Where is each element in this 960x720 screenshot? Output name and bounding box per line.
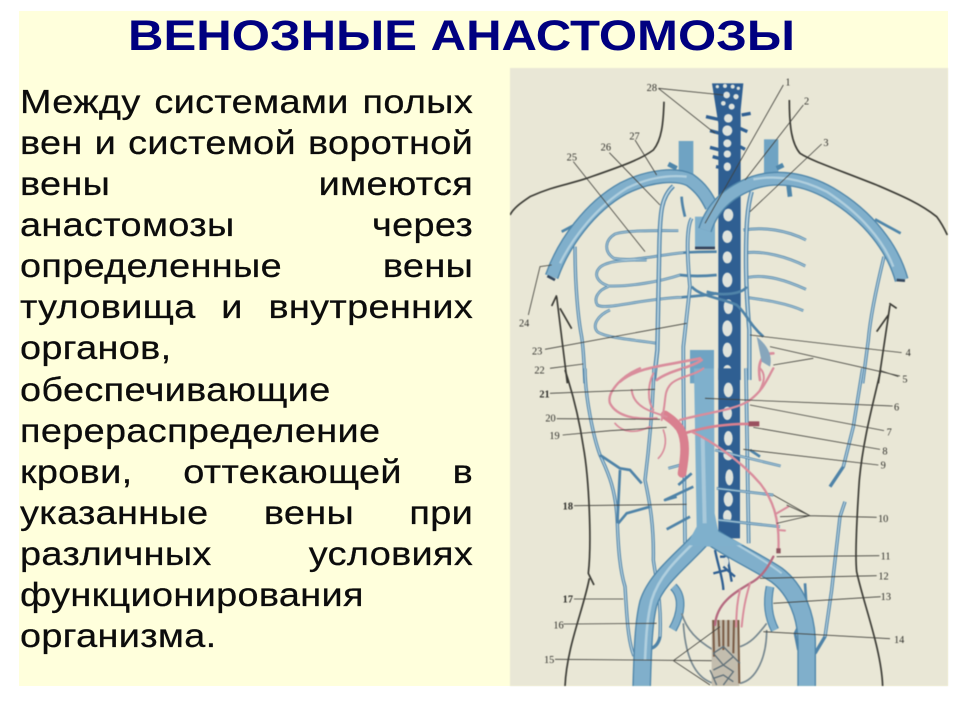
text block: description: определенные вены [20, 248, 473, 285]
text block: description: организма. [20, 618, 217, 655]
azygos and hemiazygos veins [654, 186, 763, 380]
portal vein system in pink [609, 368, 788, 627]
numbers: lower labels [539, 374, 908, 666]
numbers: upper labels: 4 [906, 348, 911, 359]
text block: description: вены имеются [20, 166, 473, 203]
body outline: shoulders and flanks [510, 100, 947, 383]
numbers: lower labels: 12 [878, 571, 889, 582]
text block: description: Между системами полых [20, 84, 473, 121]
lumbar and ascending veins [665, 368, 781, 543]
numbers: upper labels: 23 [532, 346, 542, 357]
pelvic venous loops [682, 613, 767, 683]
numbers: lower labels: 21 [539, 389, 550, 400]
numbers: upper labels: 25 [567, 153, 577, 164]
numbers: lower labels: 18 [563, 501, 573, 512]
numbers: lower labels: 20 [545, 414, 556, 425]
vertebral plexus lower [713, 368, 740, 590]
body outline: waist and hips [565, 370, 883, 687]
rectum with venous plexus [710, 620, 740, 687]
title: ВЕНОЗНЫЕ АНАСТОМОЗЫ [128, 12, 795, 60]
numbers: lower labels: 16 [553, 621, 564, 632]
vertebral venous plexus [706, 83, 751, 380]
leader lines [528, 85, 902, 376]
text block: description: перераспределение [20, 413, 380, 450]
numbers: upper labels: 26 [601, 143, 611, 154]
numbers: upper labels: 1 [785, 77, 791, 88]
numbers: lower labels: 15 [544, 655, 554, 666]
brachiocephalic and jugular veins [547, 139, 905, 281]
numbers: lower labels: 8 [882, 446, 888, 457]
numbers: upper labels: 24 [519, 319, 529, 330]
numbers: upper labels: 2 [804, 96, 809, 107]
text block: description [20, 84, 473, 655]
text block: description: указанные вены при [20, 495, 473, 532]
text block: description: функционирования [20, 577, 364, 614]
numbers: lower labels: 19 [549, 431, 560, 442]
numbers: lower labels: 14 [894, 635, 904, 646]
ribs: intercostal veins [595, 229, 806, 343]
text block: description: туловища и внутренних [20, 289, 473, 326]
numbers: upper labels: 3 [823, 138, 829, 149]
text block: description: вен и системой воротной [20, 125, 473, 162]
numbers: lower labels: 5 [902, 374, 908, 385]
leader lines [550, 371, 898, 685]
text block: description: анастомозы через [20, 207, 473, 244]
numbers: lower labels: 7 [887, 427, 892, 438]
superficial side veins [585, 368, 863, 656]
inferior vena cava top and pink veins [620, 337, 773, 383]
numbers: lower labels: 9 [881, 460, 886, 471]
numbers: lower labels: 10 [878, 514, 888, 525]
anatomical diagram of venous anastomoses [510, 68, 948, 686]
text block: description: обеспечивающие [20, 372, 331, 409]
inferior vena cava and iliac veins [642, 368, 807, 687]
upper torso [510, 77, 947, 383]
numbers: upper labels: 28 [647, 83, 657, 94]
text block: description: органов, [20, 330, 171, 367]
lower torso [539, 368, 908, 687]
numbers: upper labels: 22 [534, 366, 545, 377]
thoracic side veins [575, 247, 884, 383]
numbers: lower labels: 17 [563, 594, 573, 605]
numbers: lower labels: 13 [881, 592, 891, 603]
numbers: lower labels: 11 [881, 551, 891, 562]
numbers: upper labels [519, 77, 911, 377]
numbers: lower labels: 6 [894, 402, 899, 413]
text block: description: различных условиях [20, 536, 473, 573]
text block: description: крови, оттекающей в [20, 454, 473, 491]
numbers: upper labels: 27 [629, 131, 640, 142]
